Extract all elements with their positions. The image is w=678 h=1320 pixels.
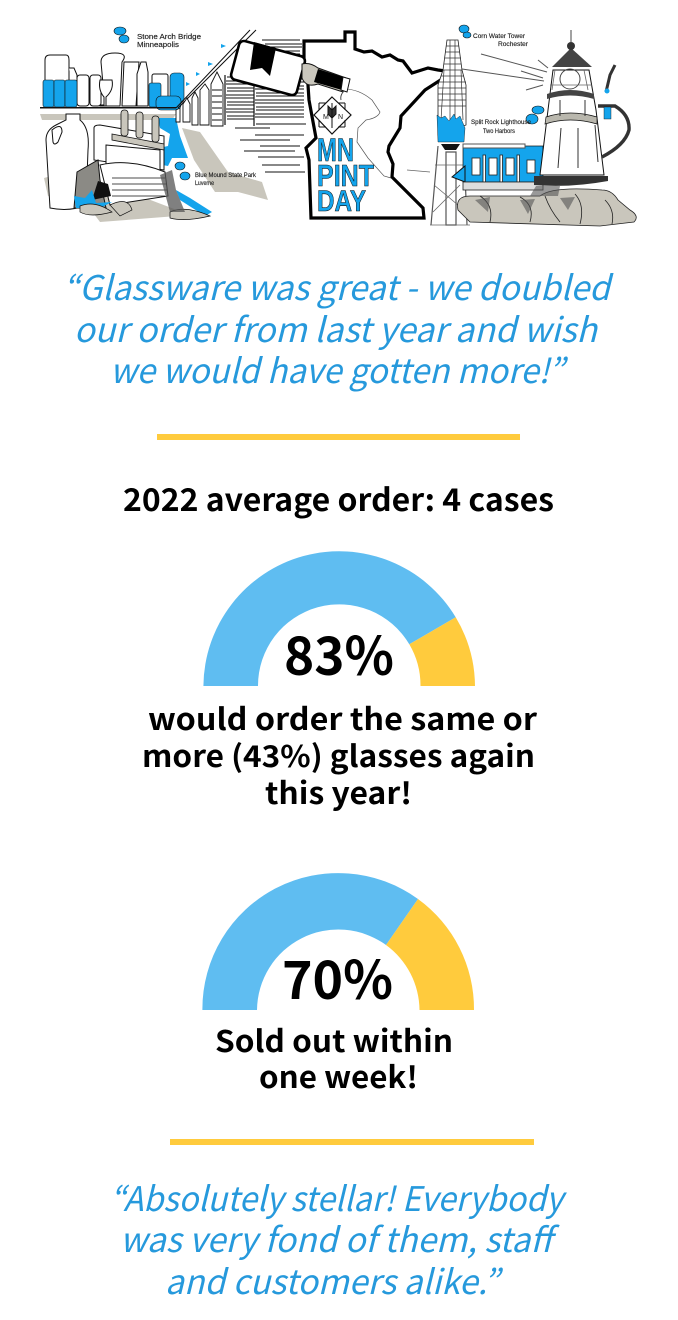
gauge blue segment bbox=[202, 873, 418, 1010]
illustration: lighthouse beer stein bbox=[534, 30, 629, 186]
illustration banner bbox=[40, 25, 636, 226]
pin label: Split Rock Lighthouse, Two Harbors: Two Harbors bbox=[483, 128, 516, 135]
quote: glassware: our order from last year and wish bbox=[74, 303, 598, 352]
heading: average order: 2022 average order: 4 cases bbox=[123, 475, 554, 520]
pin label: Corn Water Tower, Rochester: Rochester bbox=[498, 41, 529, 48]
quote: stellar: and customers alike.” bbox=[165, 1255, 504, 1304]
pin label: Blue Mound State Park, Luverne: Luverne bbox=[195, 181, 215, 187]
illustration: Mississippi river line bbox=[341, 89, 391, 178]
quote: glassware bbox=[63, 261, 614, 393]
logo: wheat diamond badge: N bbox=[338, 114, 343, 121]
illustration: jug and beer taps with stone fountain bbox=[46, 110, 212, 220]
gauge value: 70% bbox=[282, 939, 393, 1015]
pin label: Corn Water Tower, Rochester: Corn Water Tower bbox=[473, 33, 526, 40]
logo: DAY: DAY bbox=[317, 185, 366, 218]
gauge value: 83% bbox=[284, 615, 394, 691]
logo: PINT: PINT bbox=[317, 158, 374, 193]
illustration: light beams bbox=[462, 54, 548, 90]
quote: glassware: we would have gotten more!” bbox=[110, 344, 569, 393]
logo: wheat diamond badge bbox=[314, 97, 351, 134]
gauge: 83% bbox=[203, 551, 475, 691]
text: reorder statistic: would order the same or bbox=[148, 695, 538, 739]
illustration: Minnesota state outline bbox=[304, 32, 453, 218]
gauge yellow segment bbox=[386, 899, 474, 1010]
logo: MN: MN bbox=[317, 132, 354, 168]
illustration: Stone Arch Bridge bbox=[176, 30, 306, 172]
quote: stellar: “Absolutely stellar! Everybody bbox=[110, 1172, 567, 1221]
illustration: river and ground shading bbox=[40, 114, 268, 222]
text: sold out statistic bbox=[215, 1017, 453, 1097]
quote: glassware: “Glassware was great - we doubled bbox=[63, 261, 614, 310]
logo: wheat diamond badge: M bbox=[323, 114, 329, 121]
pin label: Stone Arch Bridge, Minneapolis bbox=[114, 27, 201, 49]
pin label: Stone Arch Bridge, Minneapolis: Minneapolis bbox=[137, 42, 180, 49]
logo: MN Pint Day bbox=[314, 97, 374, 218]
gauge blue segment bbox=[203, 551, 456, 686]
illustration: pouring bottle bbox=[230, 40, 350, 100]
pin label: Split Rock Lighthouse, Two Harbors: Split Rock Lighthouse bbox=[471, 119, 531, 126]
gauge: 70% bbox=[202, 873, 474, 1015]
illustration: corn water tower bbox=[407, 40, 470, 225]
gauge yellow segment bbox=[409, 617, 475, 686]
text: sold out statistic: one week! bbox=[259, 1053, 418, 1097]
quote: stellar bbox=[110, 1172, 567, 1304]
pin label: Stone Arch Bridge, Minneapolis: Stone Arch Bridge bbox=[137, 34, 201, 41]
pin label: Blue Mound State Park, Luverne bbox=[175, 162, 257, 187]
pin label: Blue Mound State Park, Luverne: Blue Mound State Park bbox=[195, 173, 257, 179]
divider bbox=[170, 1139, 534, 1145]
text: reorder statistic: this year! bbox=[265, 769, 412, 813]
text: reorder statistic: more (43%) glasses again bbox=[142, 732, 535, 776]
illustration: glasses and cans on a shelf bbox=[40, 53, 184, 110]
pin label: Split Rock Lighthouse, Two Harbors bbox=[471, 106, 544, 135]
illustration: blue depot building bbox=[452, 144, 543, 190]
text: reorder statistic bbox=[142, 695, 538, 813]
quote: stellar: was very fond of them, staff bbox=[120, 1213, 560, 1262]
illustration: boulders bbox=[458, 186, 636, 226]
pin label: Corn Water Tower, Rochester bbox=[459, 25, 529, 48]
text: sold out statistic: Sold out within bbox=[215, 1017, 453, 1061]
divider bbox=[157, 434, 520, 440]
